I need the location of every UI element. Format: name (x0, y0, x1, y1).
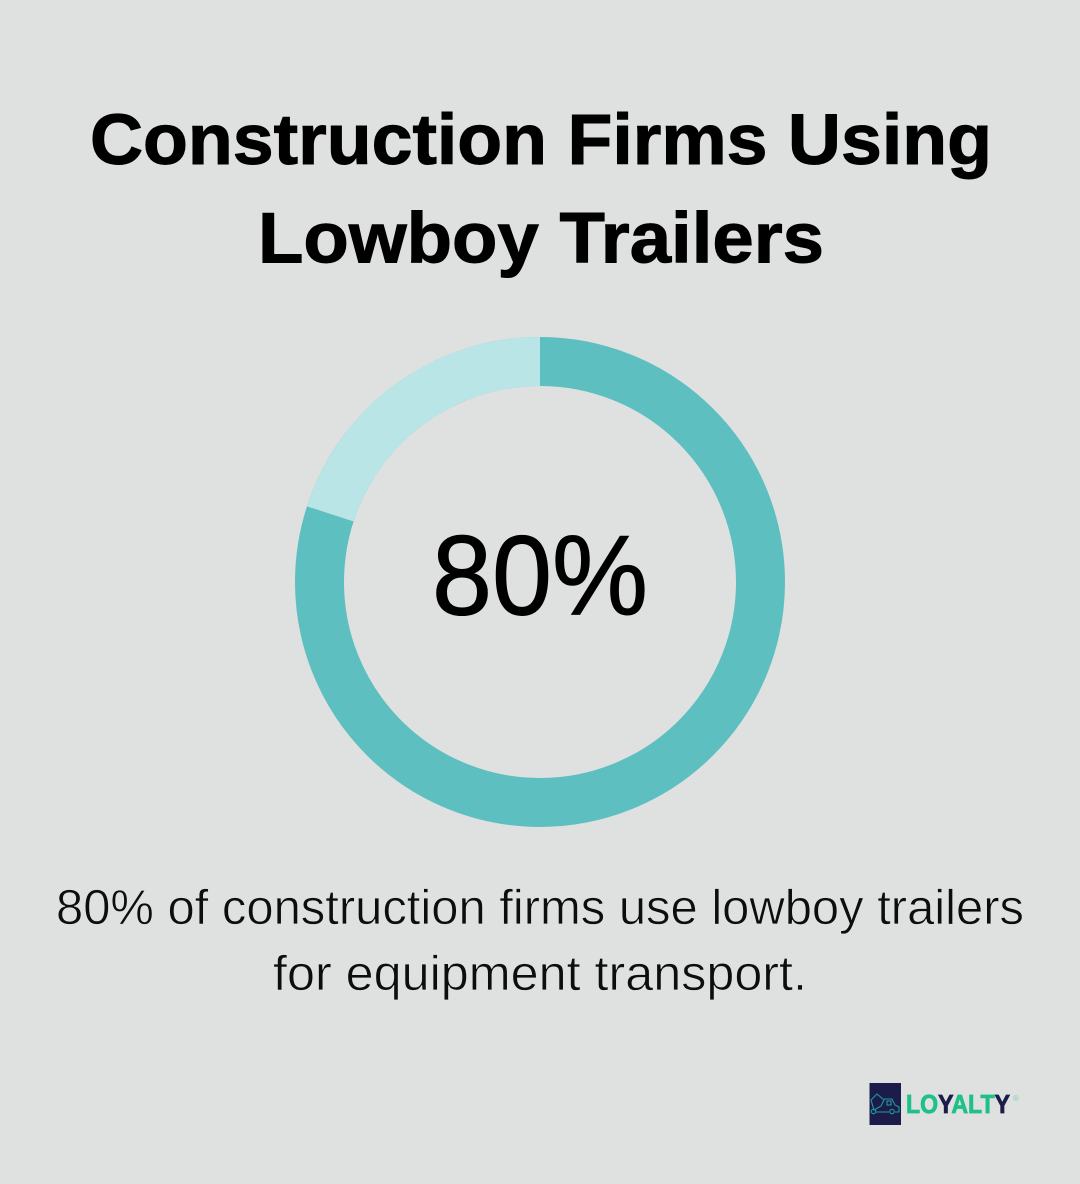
title: Construction Firms Using (90, 101, 992, 180)
icon: truck badge (870, 1083, 901, 1125)
center value: 80% (432, 512, 648, 638)
description text (56, 881, 1024, 1001)
description text: 80% of construction firms use lowboy trailers (56, 881, 1024, 935)
title (90, 101, 992, 278)
donut chart: 80% (320, 362, 760, 802)
logo: Loyalty (870, 1083, 1019, 1125)
title: Lowboy Trailers (258, 200, 824, 278)
wordmark: LOYALTY (906, 1089, 1010, 1119)
description text: for equipment transport. (273, 947, 807, 1001)
registered mark: ® (1013, 1094, 1019, 1103)
